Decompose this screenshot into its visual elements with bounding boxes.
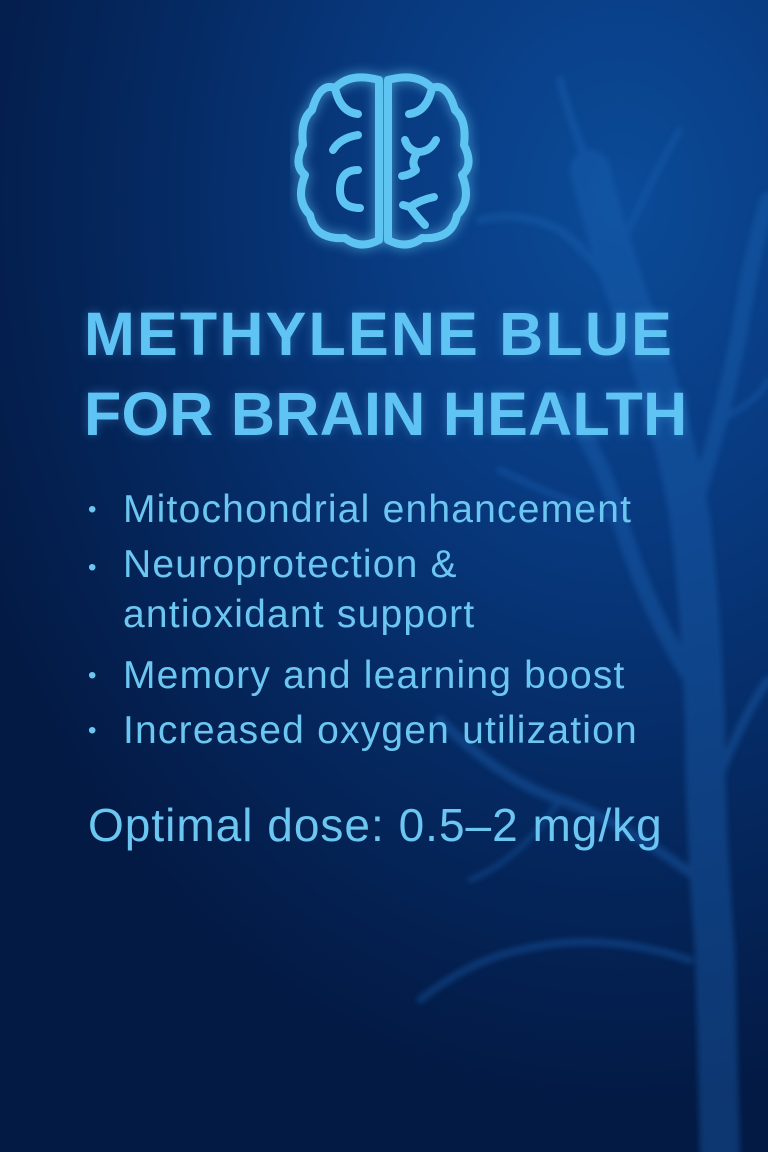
bullet 1: • bbox=[88, 496, 98, 523]
title: FOR BRAIN HEALTH bbox=[84, 380, 687, 448]
bullet list bbox=[88, 488, 638, 752]
bullet 2: antioxidant support bbox=[123, 593, 475, 636]
bullet 2 bbox=[88, 543, 475, 636]
bullet 4: • bbox=[88, 717, 98, 744]
bullet 1: Mitochondrial enhancement bbox=[123, 488, 632, 531]
title bbox=[83, 300, 687, 448]
bullet 4: Increased oxygen utilization bbox=[123, 709, 638, 752]
bullet 2: Neuroprotection & bbox=[123, 543, 458, 586]
bullet 2: • bbox=[88, 554, 98, 581]
title: METHYLENE BLUE bbox=[84, 300, 674, 368]
bullet 3: Memory and learning boost bbox=[123, 654, 626, 697]
dose text: Optimal dose: 0.5–2 mg/kg bbox=[88, 799, 663, 851]
bullet 3: • bbox=[88, 662, 98, 689]
icon: brain bbox=[290, 66, 480, 256]
